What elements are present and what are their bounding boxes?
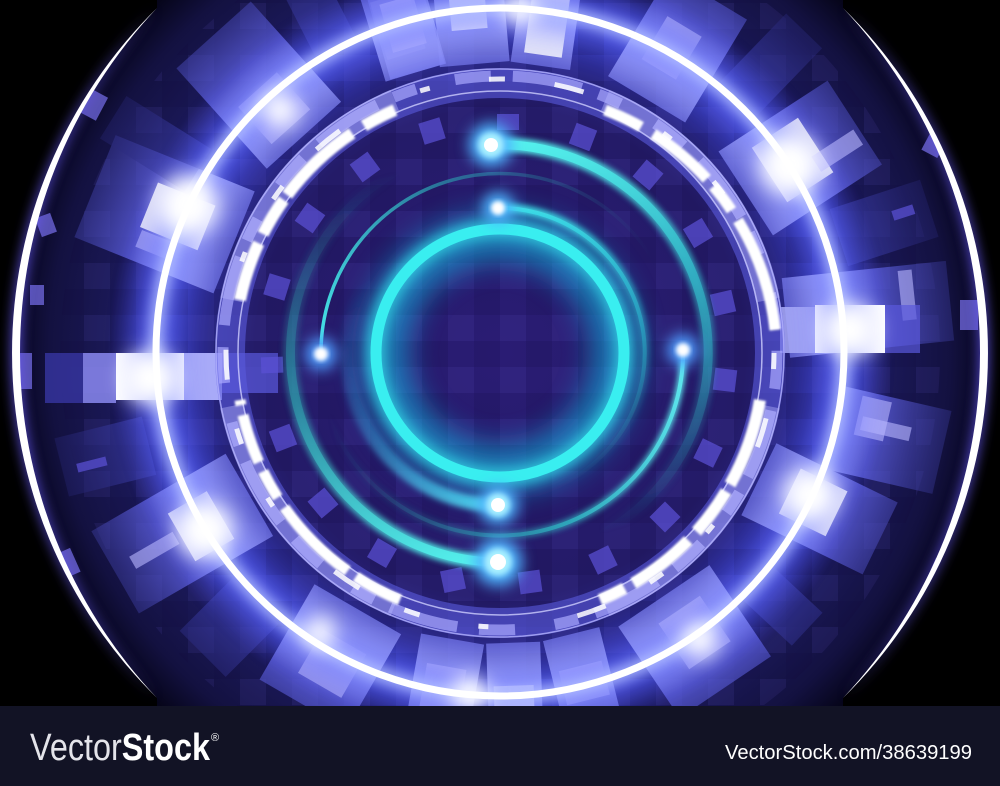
arc: thin upper-left (319, 172, 622, 348)
central cyan ring (376, 229, 624, 477)
arc: large bottom-left (286, 210, 480, 566)
right outer crescent arc (843, 8, 988, 698)
node: lower (478, 485, 518, 525)
left horizontal block band (45, 353, 278, 403)
node: top small (482, 192, 514, 224)
footer logo: VectorStock (30, 727, 211, 769)
left outer crescent arc (12, 8, 157, 698)
right horizontal block band (780, 305, 920, 353)
white ring glow (156, 8, 844, 696)
inner segmented ring (216, 69, 784, 637)
footer bar (0, 706, 1000, 786)
arc: large top-right (508, 140, 713, 504)
arc: lower-right (358, 358, 685, 538)
footer image id: VectorStock.com/38639199 (725, 742, 972, 764)
checkerboard texture (84, 0, 940, 706)
cyan spiral arc glow (290, 145, 708, 562)
node: right (667, 334, 699, 366)
glowing node dots (305, 123, 699, 586)
arc: inner upper-right (508, 206, 647, 458)
node: bottom large (474, 538, 522, 586)
bright bursts on white ring (124, 0, 876, 712)
node: left (305, 338, 337, 370)
footer registered mark: ® (211, 732, 219, 744)
cyan spiral arcs (290, 145, 708, 562)
inner rotated square chips (261, 114, 737, 594)
small fragments near outer arcs (14, 89, 978, 588)
node: top large (469, 123, 513, 167)
